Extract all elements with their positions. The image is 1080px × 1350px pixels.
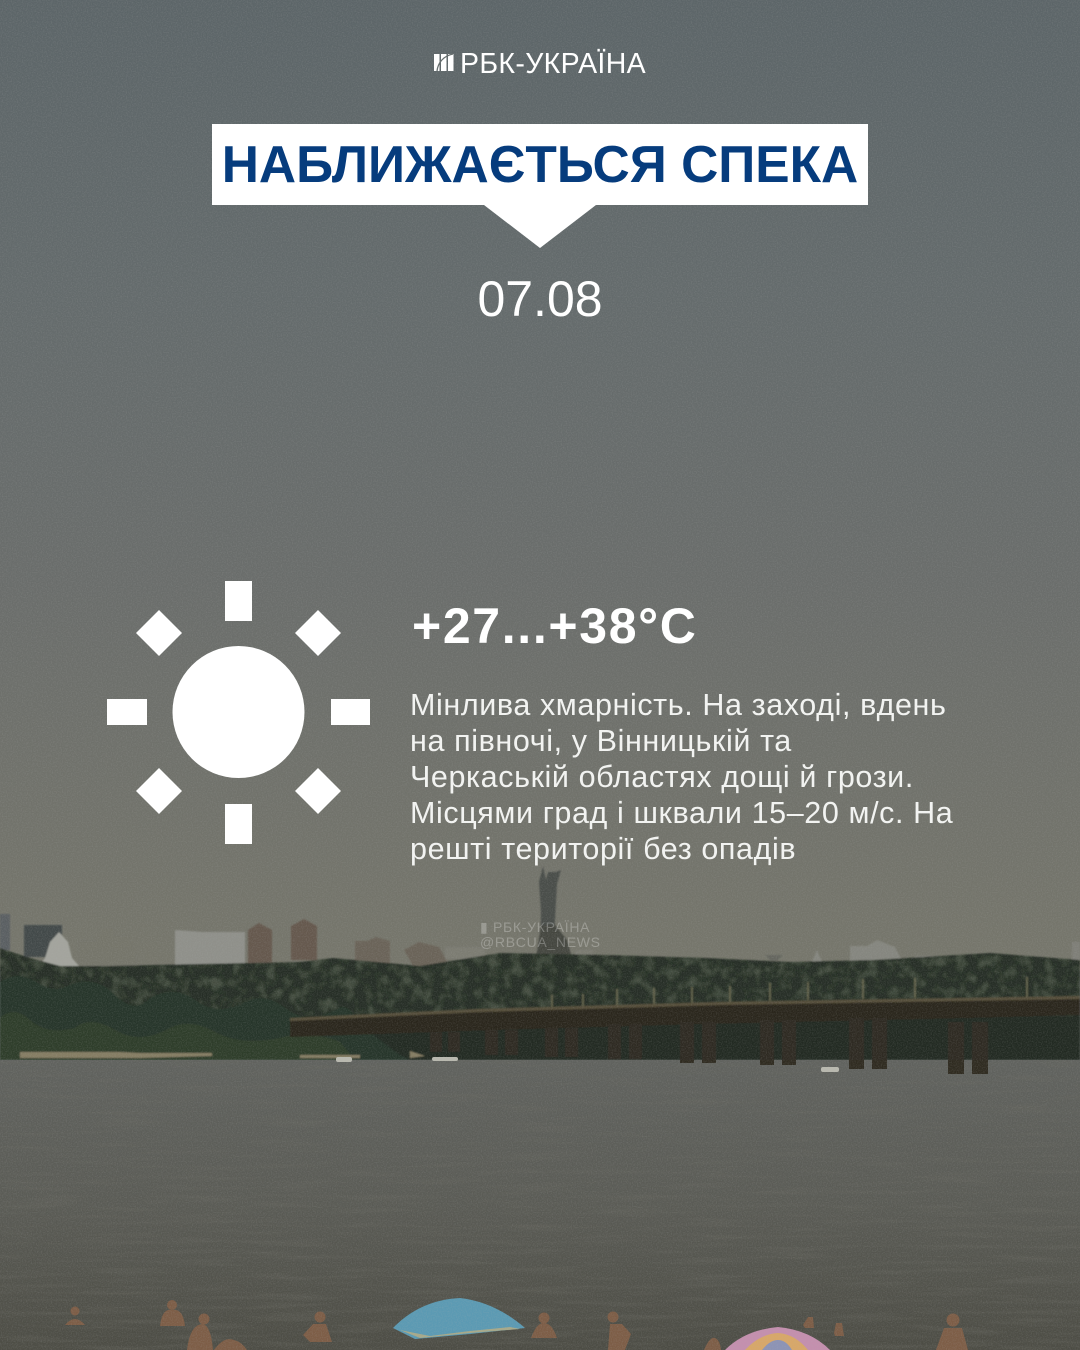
title: НАБЛИЖАЄТЬСЯ СПЕКА	[222, 135, 858, 193]
watermark: @RBCUA_NEWS	[480, 934, 601, 950]
forecast text: Черкаській областях дощі й грози.	[410, 760, 914, 794]
statue: Motherland monument	[536, 866, 572, 958]
logo wordmark: РБК-УКРАЇНА	[460, 48, 646, 80]
river water	[0, 1060, 1080, 1350]
title banner with pointer	[212, 124, 868, 248]
sand beach	[20, 1051, 425, 1058]
left island trees	[0, 976, 410, 1060]
watermark: ▮ РБК-УКРАЇНА	[480, 919, 590, 935]
white church	[39, 932, 79, 976]
forecast text: Місцями град і шквали 15–20 м/с. На	[410, 796, 953, 830]
wooded hills	[0, 948, 1080, 1017]
distant buildings	[0, 914, 1080, 973]
logo: RBC-Ukraine	[434, 48, 646, 80]
bridge deck	[290, 996, 1080, 1037]
lamp posts	[552, 977, 1027, 1009]
umbrella: blue	[393, 1298, 525, 1339]
bridge piers	[430, 1018, 988, 1074]
forecast text: решті території без опадів	[410, 832, 796, 866]
icon: sun	[107, 581, 370, 844]
pier bases in water	[680, 1060, 988, 1074]
forecast text	[410, 688, 953, 866]
date: 07.08	[477, 271, 603, 327]
forecast text: на півночі, у Вінницькій та	[410, 724, 792, 758]
temperature: +27...+38°C	[412, 598, 698, 654]
far shore	[0, 1016, 1080, 1060]
umbrella: rainbow	[725, 1327, 830, 1350]
forecast text: Мінлива хмарність. На заході, вдень	[410, 688, 946, 722]
watermark	[480, 919, 601, 950]
bathers	[65, 1300, 968, 1350]
boats	[336, 1057, 839, 1072]
logo mark	[434, 54, 454, 71]
